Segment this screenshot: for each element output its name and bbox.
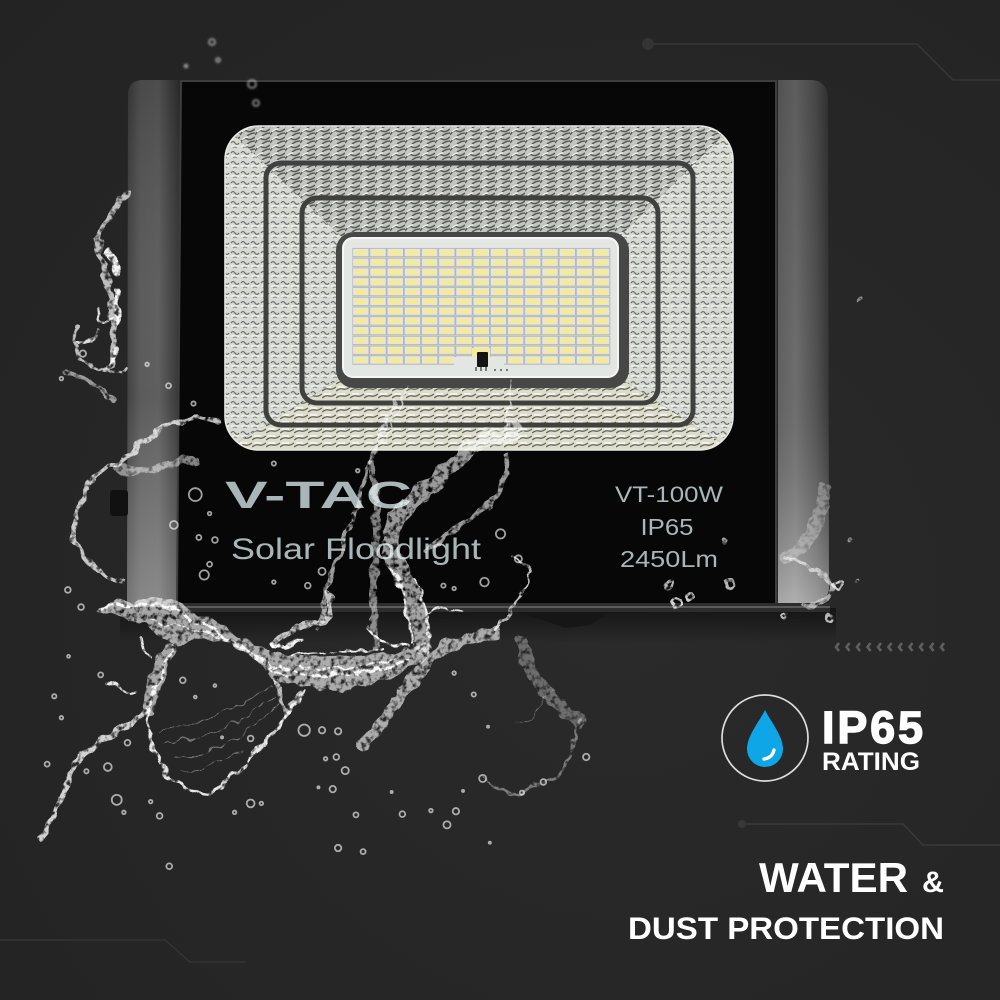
heading: water and dust protection (628, 854, 944, 946)
lens bottom facet (225, 377, 733, 450)
side switch (110, 490, 128, 516)
lens left facet (225, 126, 343, 450)
lumen label: 2450Lm (620, 546, 718, 572)
water line: WATER (759, 854, 908, 901)
product name: Solar Floodlight (231, 533, 482, 566)
upper left trail (74, 419, 219, 582)
lens top facet (225, 126, 733, 238)
board contacts (476, 367, 507, 371)
lens (225, 126, 733, 450)
right side trail (361, 557, 531, 746)
right side fin (778, 80, 829, 604)
LED grid (352, 248, 610, 365)
circuit line: top right (642, 38, 1000, 80)
bottom lip (170, 603, 830, 628)
outer groove (266, 163, 693, 425)
icon: water drop (747, 710, 783, 767)
floodlight body (110, 80, 830, 628)
lens right facet (618, 126, 733, 450)
lower left trail (40, 711, 147, 839)
circuit line: bottom right (738, 820, 1000, 845)
ampersand: & (922, 866, 944, 899)
LED board (343, 238, 618, 377)
stream highlights (101, 604, 408, 678)
water droplets (45, 350, 589, 869)
left side fin (127, 80, 180, 607)
logo text: V-TAC (225, 475, 412, 517)
IP label: IP65 (640, 514, 694, 540)
faint right splash (483, 643, 579, 793)
badge ring (722, 695, 808, 781)
circuit line: bottom left (0, 940, 245, 962)
front black panel (177, 81, 776, 604)
IP65 badge (722, 695, 923, 781)
PIR sensor (477, 352, 488, 367)
floodlight shadow (120, 608, 836, 642)
IP65 heading: IP65 (822, 702, 923, 753)
water falls (272, 379, 515, 646)
water splash (40, 350, 589, 869)
model number: VT-100W (615, 482, 723, 507)
top droplets (184, 39, 259, 106)
middle groove (302, 198, 658, 403)
chevron row (836, 643, 944, 651)
left arc of water (108, 639, 304, 796)
lens rim (225, 126, 733, 450)
rating label: RATING (822, 748, 920, 776)
drop highlight (764, 750, 774, 759)
main water stream (97, 597, 429, 691)
LED well (336, 232, 629, 388)
right edge splash (667, 298, 862, 622)
board gap (454, 357, 504, 367)
dust protection line: DUST PROTECTION (628, 910, 944, 946)
upper left splash (66, 195, 126, 400)
